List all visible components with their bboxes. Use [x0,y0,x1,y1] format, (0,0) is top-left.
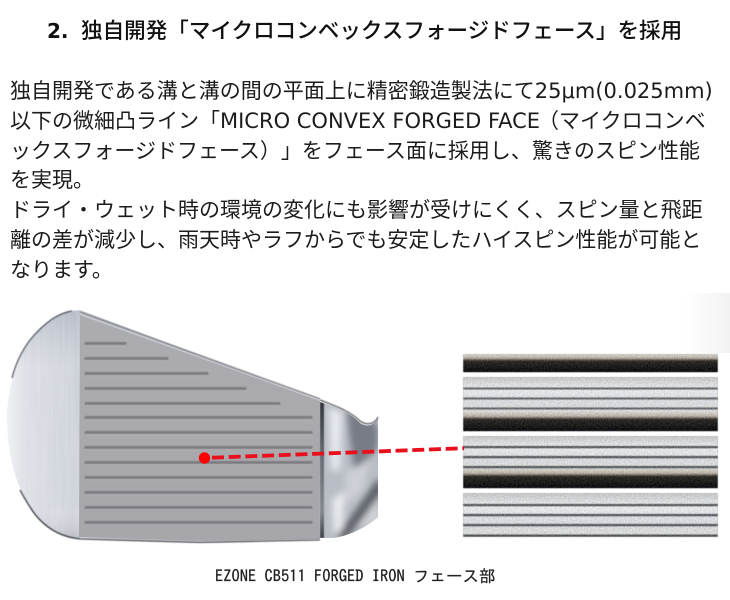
strip 4 [463,493,718,537]
strip 3 [463,436,718,488]
macro face detail [463,354,718,537]
body text: なります。 [10,254,113,284]
title: 独自開発「マイクロコンベックスフォージドフェース」を採用 [81,14,682,45]
iron head photo [7,310,384,543]
caption: EZONE CB511 FORGED IRON フェース部 [215,567,496,584]
body text: ックスフォージドフェース）」をフェース面に採用し、驚きのスピン性能 [10,135,700,165]
body text: 以下の微細凸ライン「MICRO CONVEX FORGED FACE（マイクロコンベ [10,105,706,135]
title: 2. [47,19,69,43]
body text [10,75,713,284]
hosel [319,402,378,538]
body text: 離の差が減少し、雨天時やラフからでも安定したハイスピン性能が可能と [10,224,701,254]
head outline [7,310,320,543]
brushed texture [9,311,80,539]
hosel edge [320,400,378,424]
background fade [685,293,730,353]
body text: 独自開発である溝と溝の間の平面上に精密鍛造製法にて25μm(0.025mm) [10,75,713,105]
red pointer [199,448,464,464]
grooves [86,344,312,524]
toe shading [7,311,80,539]
strip 2 [463,377,718,432]
face edges [80,312,320,399]
face plate [79,315,320,541]
pointer dot [199,452,210,464]
body text: を実現。 [10,164,94,194]
strip 1 [463,354,718,372]
rim strokes [12,311,72,378]
body text: ドライ・ウェット時の環境の変化にも影響が受けにくく、スピン量と飛距 [10,194,703,224]
dashed line [212,448,464,458]
photo panel [7,293,730,544]
